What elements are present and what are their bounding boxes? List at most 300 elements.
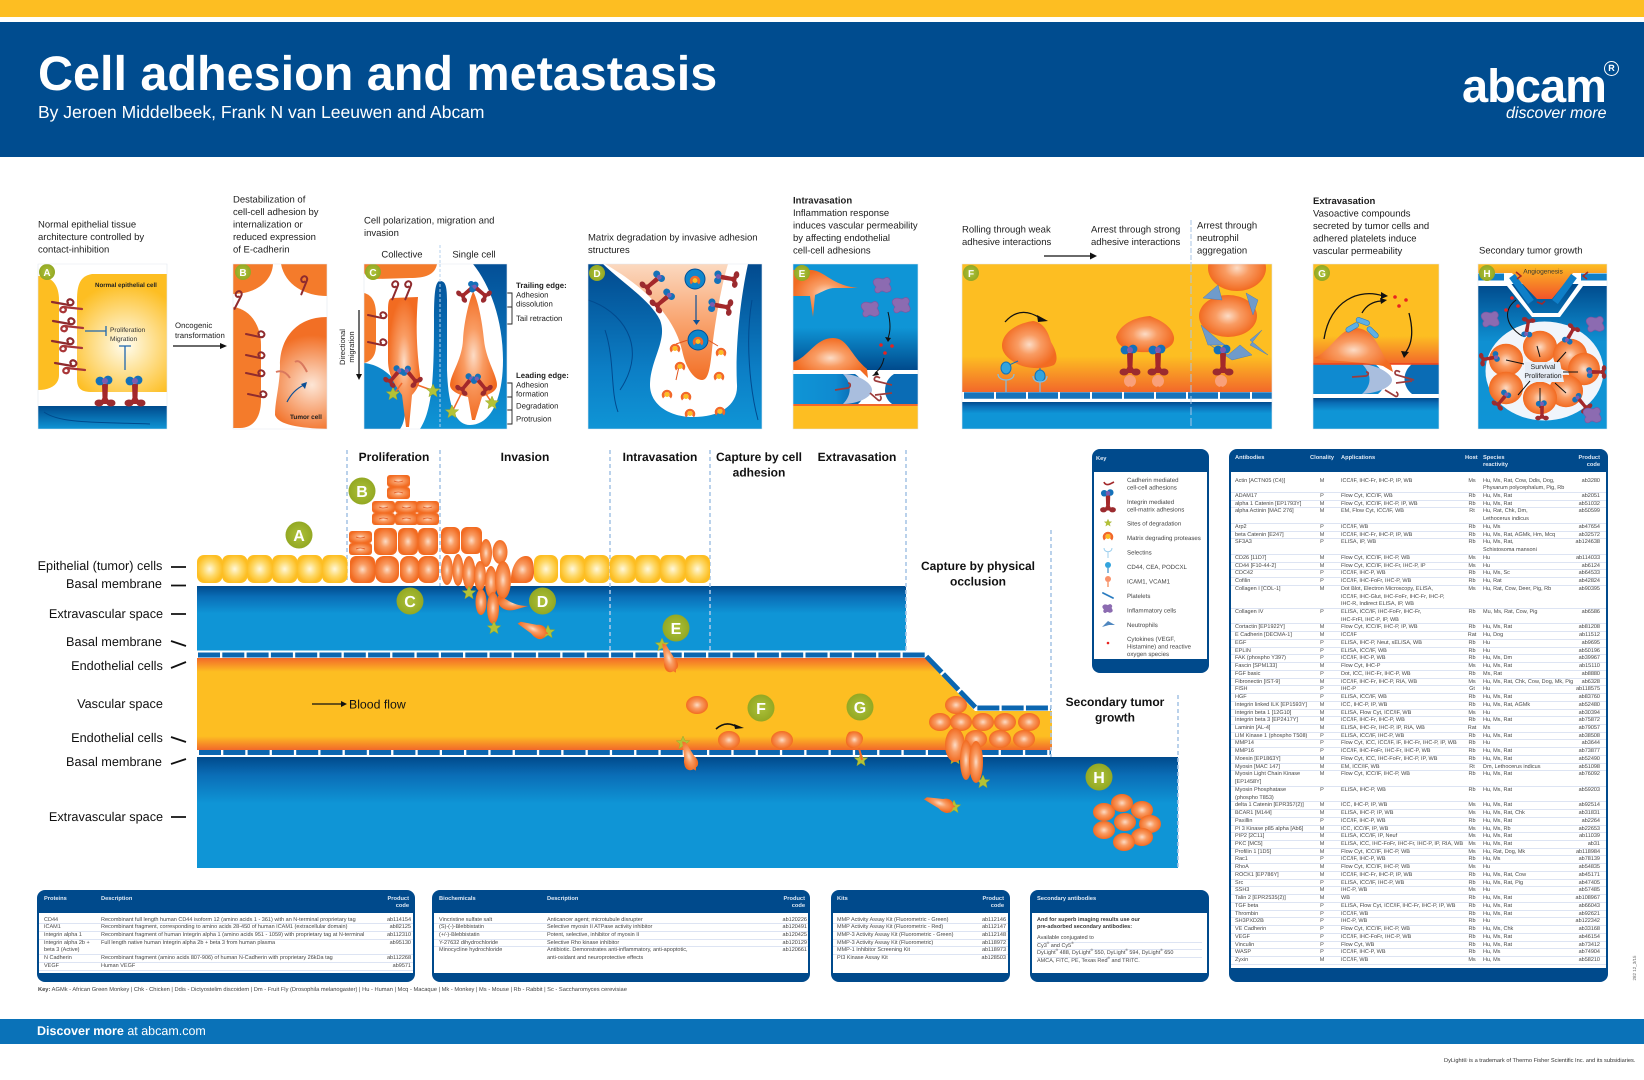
proteins rows: Full length native human Integrin alpha 2b + beta 3 from human plasma — [101, 940, 275, 946]
antibodies table rows: ab81208 — [1579, 624, 1600, 630]
panel D: matrix degradation — [588, 264, 762, 429]
icon: CD44 — [1105, 562, 1111, 573]
antibodies table rows: Ms — [1468, 710, 1476, 716]
antibodies table rows: ab66043 — [1579, 903, 1600, 909]
directional migration arrow: migration — [347, 331, 356, 363]
key labels: oxygen species — [1127, 651, 1169, 658]
icon: cadherin — [1104, 482, 1114, 485]
antibodies table rows: Hu, Ms — [1483, 856, 1500, 862]
badge F: F — [968, 269, 974, 280]
antibodies table rows: VE Cadherin — [1235, 926, 1266, 932]
caption B: internalization or — [233, 220, 303, 230]
antibodies table rows: LIM Kinase 1 (phospho T508) — [1235, 733, 1307, 739]
badge G — [1314, 265, 1330, 281]
antibodies table rows: CD44 [F10-44-2] — [1235, 563, 1276, 569]
antibodies table rows: P — [1320, 787, 1324, 793]
antibodies table rows: Rb — [1468, 872, 1476, 878]
proteins rows — [39, 913, 413, 973]
antibodies table rows: FGF basic — [1235, 671, 1260, 677]
antibodies table rows: Rb — [1468, 694, 1476, 700]
antibodies table rows: PIP2 [2C11] — [1235, 833, 1264, 839]
antibodies table rows: WB — [1341, 895, 1350, 901]
antibodies table rows — [1231, 472, 1606, 968]
antibodies table rows: Hu, Rat — [1483, 578, 1502, 584]
badges: B — [356, 484, 368, 501]
antibodies table rows: P — [1320, 648, 1324, 654]
antibodies table rows: Rb — [1468, 578, 1476, 584]
antibodies table rows: Flow Cyt, ICC, IHC-FoFr, IHC-P, IP, WB — [1341, 756, 1437, 762]
antibodies table rows: Ms, Rat — [1483, 671, 1502, 677]
secondary header: Secondary antibodies — [1037, 896, 1096, 902]
key labels: Integrin mediated — [1127, 499, 1174, 506]
antibodies table rows: Hu, Ms, Rat — [1483, 942, 1512, 948]
antibodies table rows: TGF beta — [1235, 903, 1258, 909]
antibodies table rows: M — [1320, 632, 1324, 638]
secondary tumor cluster — [1093, 794, 1161, 851]
antibodies table rows: P — [1320, 748, 1324, 754]
antibodies table rows: FAK (phospho Y397) — [1235, 655, 1286, 661]
antibodies table rows: M — [1320, 826, 1324, 832]
badges: C — [404, 594, 416, 611]
migrating tumor cells — [515, 616, 957, 815]
antibodies table rows: ab38508 — [1579, 733, 1600, 739]
panel B: destabilization — [232, 264, 327, 429]
key labels: Sites of degradation — [1127, 520, 1181, 528]
antibodies table rows: Integrin beta 1 [12G10] — [1235, 710, 1291, 716]
antibodies table rows: Hu, Dog — [1483, 632, 1503, 638]
badge F — [963, 265, 979, 281]
antibodies table rows: Rb — [1468, 609, 1476, 615]
antibodies table rows: ab124638 — [1576, 539, 1600, 545]
antibodies table rows: ADAM17 — [1235, 493, 1257, 499]
antibodies table rows: RhoA — [1235, 864, 1249, 870]
antibodies table rows: ab31831 — [1579, 810, 1600, 816]
antibodies table rows: Rb — [1468, 911, 1476, 917]
label: proliferation migration: Migration — [110, 336, 137, 343]
antibodies table rows: IHC-FrFl, IHC-P, IP, WB — [1341, 617, 1399, 623]
antibodies table rows: Hu, Ms, Rat — [1483, 802, 1512, 808]
antibodies table rows: Hu, Rat, Chk, Dm, — [1483, 508, 1528, 514]
antibodies table rows: ELISA, ICC/IF, IHC-P, WB — [1341, 733, 1404, 739]
antibodies table rows: PI 3 Kinase p85 alpha [Ab6] — [1235, 826, 1303, 832]
icon: selectin — [1104, 548, 1112, 558]
antibodies table rows: ICC/IF — [1341, 632, 1357, 638]
key labels: Cytokines (VEGF, — [1127, 636, 1175, 643]
antibodies table rows: Hu, Ms — [1483, 524, 1500, 530]
proteins rows: Recombinant fragment (amino acids 807-906) of human N-Cadherin with proprietary 26kDa tag — [101, 955, 333, 961]
antibodies table rows: ab74904 — [1579, 949, 1600, 955]
antibodies table rows: ab42824 — [1579, 578, 1600, 584]
antibodies table rows: Hu — [1483, 648, 1490, 654]
antibodies table rows: EGF — [1235, 640, 1246, 646]
antibodies table rows: ab92514 — [1579, 802, 1600, 808]
proteins rows: N Cadherin — [44, 955, 72, 961]
antibodies table rows: Laminin [AL-4] — [1235, 725, 1270, 731]
brackets and edge labels: Trailing edge: — [516, 281, 567, 290]
key labels: CD44, CEA, PODCXL — [1127, 564, 1188, 571]
kits rows: MMP Activity Assay Kit (Fluorometric - Green) — [837, 916, 948, 922]
brackets and edge labels — [507, 281, 569, 424]
proteins rows: ab112310 — [387, 932, 411, 938]
antibodies table rows: ab73877 — [1579, 748, 1600, 754]
proteins rows: ab114154 — [387, 916, 411, 922]
antibodies table rows: M — [1320, 849, 1324, 855]
antibodies table rows: Hu, Ms, Rat — [1483, 694, 1512, 700]
antibodies table rows: Hu, Ms, Rat — [1483, 818, 1512, 824]
antibodies table rows: M — [1320, 478, 1324, 484]
antibodies table rows: Hu, Ms, Rat, AGMk — [1483, 702, 1530, 708]
caption E: cell-cell adhesions — [793, 246, 871, 256]
caption G: vascular permeability — [1313, 246, 1402, 257]
antibodies table rows: Flow Cyt, ICC/IF, IHC-P, WB — [1341, 864, 1410, 870]
antibodies table rows: ab50599 — [1579, 508, 1600, 514]
poster code: 282 12_3/15 — [1632, 955, 1637, 981]
badge A: A — [43, 268, 51, 279]
antibodies table rows: Rb — [1468, 748, 1476, 754]
proteins rows: Human VEGF — [101, 963, 135, 969]
antibodies table rows: Cofilin — [1235, 578, 1250, 584]
brackets and edge labels: Protrusion — [516, 414, 552, 424]
antibodies table rows: (phospho T853) — [1235, 795, 1274, 801]
antibodies table rows: WASP — [1235, 949, 1251, 955]
antibodies table rows: Rb — [1468, 501, 1476, 507]
biochemicals rows: Anticancer agent; microtubule disrupter — [547, 916, 643, 922]
antibodies table rows: ELISA, IP, WB — [1341, 539, 1376, 545]
antibodies table rows: P — [1320, 655, 1324, 661]
antibodies table rows: ab114033 — [1576, 555, 1600, 561]
invading tumor cells — [441, 527, 534, 624]
kits rows: ab128503 — [982, 955, 1006, 961]
antibodies table rows: Hu, Ms, Rat, — [1483, 539, 1514, 545]
antibodies table rows: ICC/IF, IHC-P, WB — [1341, 655, 1386, 661]
biochemicals rows: (+/-)-Blebbistatin — [439, 932, 480, 938]
antibodies table rows: ab64533 — [1579, 570, 1600, 576]
antibodies table rows: Hu, Ms, Rat — [1483, 787, 1512, 793]
antibodies table rows: MMP16 — [1235, 748, 1254, 754]
antibodies table rows: P — [1320, 640, 1324, 646]
antibodies table rows: Flow Cyt, ICC/IF, IHC-P, WB — [1341, 771, 1410, 777]
antibodies table rows: M — [1320, 501, 1324, 507]
endothelium — [197, 652, 1052, 756]
antibodies table rows: Hu, Ms, Rat, Chk — [1483, 810, 1525, 816]
antibodies table rows: Integrin beta 3 [EP2417Y] — [1235, 717, 1298, 723]
antibodies table header: code — [1587, 462, 1600, 468]
proteins rows: Integrin alpha 2b + — [44, 940, 90, 946]
antibodies table rows: M — [1320, 872, 1324, 878]
antibodies table rows: M — [1320, 957, 1324, 963]
antibodies table rows: ab39967 — [1579, 655, 1600, 661]
antibodies table rows: ab11039 — [1579, 833, 1600, 839]
antibodies table rows: P — [1320, 733, 1324, 739]
yellow epithelial cells — [197, 555, 710, 583]
antibodies table rows: ab76092 — [1579, 771, 1600, 777]
antibodies table rows: ab22653 — [1579, 826, 1600, 832]
antibodies table rows: Rb — [1468, 624, 1476, 630]
icon: star — [1104, 519, 1112, 526]
upper extravascular space — [197, 586, 906, 651]
kits rows: MMP Activity Assay Kit (Fluorometric - Red) — [837, 924, 943, 930]
biochemicals rows: Selective myosin II ATPase activity inhibitor — [547, 924, 652, 930]
antibodies table rows: Ms — [1468, 833, 1476, 839]
antibodies table rows: Ms — [1468, 802, 1476, 808]
antibodies table rows: delta 1 Catenin [EPR357(2)] — [1235, 802, 1304, 808]
biochemicals rows: ab120491 — [783, 924, 807, 930]
antibodies table rows: P — [1320, 818, 1324, 824]
divider in F — [1190, 220, 1192, 264]
proliferating tumor cells — [349, 475, 439, 583]
antibodies table rows: [EP1458Y] — [1235, 779, 1261, 785]
antibodies table rows: Gt — [1469, 686, 1475, 692]
badge G: G — [1318, 269, 1326, 280]
antibodies table rows: Rb — [1468, 733, 1476, 739]
antibodies table rows: Rb — [1468, 787, 1476, 793]
captions F: aggregation — [1197, 246, 1247, 256]
antibodies table rows: Hu, Ms, Sc — [1483, 570, 1510, 576]
antibodies table rows: M — [1320, 895, 1324, 901]
key panel — [1092, 449, 1209, 673]
antibodies table rows: Hu, Ms, Rat — [1483, 493, 1512, 499]
antibodies table rows: M — [1320, 810, 1324, 816]
label: angiogenesis: Angiogenesis — [1523, 268, 1563, 276]
label: survival proliferation: Proliferation — [1524, 372, 1562, 380]
antibodies table rows: Physarum polycephalum, Pig, Rb — [1483, 485, 1564, 491]
biochemicals rows: ab120425 — [783, 932, 807, 938]
antibodies table rows: Rb — [1468, 756, 1476, 762]
antibodies table rows: P — [1320, 918, 1324, 924]
antibodies table rows: ab3644 — [1582, 740, 1600, 746]
antibodies table rows: ICC/IF, IHC-FoFr, IHC-P, WB — [1341, 578, 1411, 584]
antibodies table rows: Moesin [EP1863Y] — [1235, 756, 1281, 762]
directional migration arrow — [338, 310, 362, 380]
antibodies table rows: MMP14 — [1235, 740, 1254, 746]
antibodies table rows: ab15110 — [1579, 663, 1600, 669]
antibodies table rows: Dot Blot, Electron Microscopy, ELISA, — [1341, 586, 1433, 592]
kits rows: PI3 Kinase Assay Kit — [837, 955, 888, 961]
antibodies table rows: ab6124 — [1582, 563, 1600, 569]
table: biochemicals — [432, 890, 810, 982]
antibodies table rows: P — [1320, 856, 1324, 862]
antibodies table rows: ab78139 — [1579, 856, 1600, 862]
antibodies table rows: ICC/IF, IHC-Fr, IHC-P, IP, WB — [1341, 532, 1412, 538]
secondary body: And for superb imaging results use our — [1037, 916, 1140, 922]
caption C: Cell polarization, migration and — [364, 216, 494, 226]
antibodies table rows: P — [1320, 740, 1324, 746]
abcam logo: discover more — [1506, 105, 1606, 122]
antibodies table rows: Hu, Ms, Rat — [1483, 663, 1512, 669]
antibodies table rows: E Cadherin [DECMA-1] — [1235, 632, 1292, 638]
antibodies table rows: ab58210 — [1579, 957, 1600, 963]
tissue layer labels: Basal membrane — [66, 635, 162, 649]
biochemicals rows: Selective Rho kinase inhibitor — [547, 940, 619, 946]
antibodies table rows: Flow Cyt, WB — [1341, 942, 1374, 948]
antibodies table rows: ab54835 — [1579, 864, 1600, 870]
antibodies table rows: alpha Actinin [MAC 276] — [1235, 508, 1294, 514]
antibodies table rows: P — [1320, 949, 1324, 955]
caption G: Extravasation — [1313, 196, 1376, 207]
antibodies table rows: ICC/IF, WB — [1341, 524, 1368, 530]
antibodies table header: Clonality — [1310, 454, 1334, 460]
tissue layer labels: Endothelial cells — [71, 659, 163, 673]
abcam logo: R — [1608, 63, 1615, 73]
subtitle: By Jeroen Middelbeek, Frank N van Leeuwen and Abcam — [38, 102, 485, 122]
badges: H — [1093, 770, 1105, 787]
dashed stage dividers — [347, 450, 1178, 868]
stage heading: capture by physical occlusion: Capture by physical — [921, 559, 1035, 573]
kits rows: MMP-1 Inhibitor Screening Kit — [837, 947, 910, 953]
antibodies table rows: ELISA, Flow Cyt, ICC/IF, WB — [1341, 710, 1411, 716]
antibodies table rows: ELISA, IHC-P, WB — [1341, 787, 1386, 793]
kits header: Product — [982, 896, 1004, 902]
captions F: adhesive interactions — [1091, 237, 1180, 248]
kits rows: ab118972 — [982, 940, 1006, 946]
antibodies table rows: ab8880 — [1582, 671, 1600, 677]
proteins header — [44, 896, 409, 909]
antibodies table rows: Hu, Ms, Rat — [1483, 771, 1512, 777]
kits rows: MMP-3 Activity Assay Kit (Fluorometric) — [837, 940, 933, 946]
label: survival proliferation: Survival — [1531, 364, 1555, 371]
kits rows — [833, 913, 1008, 973]
proteins rows: ab82125 — [390, 924, 411, 930]
biochemicals rows: Y-27632 dihydrochloride — [439, 940, 498, 946]
antibodies table rows: P — [1320, 671, 1324, 677]
antibodies table header: Species — [1483, 454, 1505, 460]
antibodies table rows: ICC/IF, IHC-P, WB — [1341, 949, 1386, 955]
antibodies table rows: ICC/IF, IHC-P, WB — [1341, 570, 1386, 576]
antibodies table header: Antibodies — [1235, 454, 1264, 460]
antibodies table rows: Hu, Rat, Dog, Mk — [1483, 849, 1525, 855]
antibodies table rows: ROCK1 [EP786Y] — [1235, 872, 1279, 878]
panel E: intravasation — [793, 264, 918, 429]
badge H: H — [1483, 269, 1491, 280]
antibodies table rows: Rat — [1468, 632, 1476, 638]
antibodies table rows: Talin 2 [EPR2535(2)] — [1235, 895, 1286, 901]
illustration canvas — [38, 196, 1608, 868]
antibodies table rows: Hu — [1483, 686, 1490, 692]
antibodies table rows: CD26 [11D7] — [1235, 555, 1266, 561]
antibodies table rows: Hu, Ms, Rat — [1483, 733, 1512, 739]
biochemicals header — [439, 896, 805, 909]
antibodies table rows: M — [1320, 802, 1324, 808]
antibodies table rows: Arp2 — [1235, 524, 1247, 530]
antibodies table rows: Flow Cyt, ICC/IF, IHC-P, WB — [1341, 926, 1410, 932]
antibodies table rows: Rb — [1468, 880, 1476, 886]
kits rows: ab112148 — [982, 932, 1006, 938]
biochemicals rows — [434, 913, 808, 973]
antibodies table rows: ICC/IF, IHC-Glut, IHC-FoFr, IHC-Fr, IHC-P, — [1341, 594, 1444, 600]
antibodies table rows: ICC, IHC-P, IP, WB — [1341, 802, 1387, 808]
biochemicals header: Biochemicals — [439, 896, 476, 902]
antibodies table rows: ELISA, ICC/IF, IHC-P, WB — [1341, 880, 1404, 886]
kits rows: ab112146 — [982, 916, 1006, 922]
antibodies table rows: Flow Cyt, ICC/IF, IHC-P, IP, WB — [1341, 501, 1418, 507]
antibodies table rows: ab51032 — [1579, 501, 1600, 507]
proteins header: code — [396, 903, 409, 909]
tissue layer labels: Epithelial (tumor) cells — [38, 559, 162, 573]
antibodies table rows: PKC [MC5] — [1235, 841, 1263, 847]
antibodies table rows: Flow Cyt, ICC/IF, IHC-P, WB — [1341, 849, 1410, 855]
antibodies table rows: Integrin linked ILK [EP1593Y] — [1235, 702, 1307, 708]
antibodies table rows: ab6586 — [1582, 609, 1600, 615]
table: proteins — [37, 890, 415, 982]
antibodies table rows: Rb — [1468, 740, 1476, 746]
caption A: Normal epithelial tissue — [38, 220, 136, 230]
biochemicals rows: Potent, selective, inhibitor of myosin II — [547, 932, 639, 938]
antibodies table rows: Hu, Ms, Rat — [1483, 756, 1512, 762]
biochemicals header: Description — [547, 896, 578, 902]
antibodies table rows: Rb — [1468, 648, 1476, 654]
tissue layer labels: Basal membrane — [66, 755, 162, 769]
icon: protease — [1103, 532, 1113, 540]
arrow: oncogenic transformation: Oncogenic — [175, 321, 212, 330]
antibodies table rows: M — [1320, 833, 1324, 839]
antibodies table rows: IHC-P, WB — [1341, 887, 1367, 893]
antibodies table rows: Ms — [1468, 849, 1476, 855]
antibodies table rows: Rb — [1468, 818, 1476, 824]
antibodies table rows: BCAR1 [M144] — [1235, 810, 1272, 816]
key labels — [1127, 477, 1201, 658]
antibodies table rows: Zyxin — [1235, 957, 1248, 963]
antibodies table rows: ab118575 — [1576, 686, 1600, 692]
antibodies table rows: ELISA, IHC-Fr, IHC-P, IP, RIA, WB — [1341, 725, 1425, 731]
antibodies table header: Applications — [1341, 454, 1375, 460]
antibodies table rows: M — [1320, 624, 1324, 630]
antibodies table rows: ELISA, IHC-P, IP, WB — [1341, 810, 1393, 816]
badges — [286, 478, 1112, 790]
antibodies table rows: Hu, Ms, Rat — [1483, 624, 1512, 630]
kits header — [837, 896, 1004, 909]
antibodies table rows: Hu — [1483, 864, 1490, 870]
antibodies table rows: Rb — [1468, 771, 1476, 777]
icon: inflammatory cell — [1103, 604, 1112, 613]
blood flow label: Blood flow — [349, 698, 406, 712]
antibodies table rows: M — [1320, 887, 1324, 893]
proteins rows: CD44 — [44, 916, 58, 922]
antibodies table rows: M — [1320, 555, 1324, 561]
kits rows: MMP-3 Activity Assay Kit (Fluorometric - Green) — [837, 932, 953, 938]
antibodies table rows: Actin [ACTN05 (C4)] — [1235, 478, 1285, 484]
trademark note: DyLight® is a trademark of Thermo Fisher Scientific Inc. and its subsidiaries. — [1444, 1058, 1635, 1064]
antibodies table rows: HGF — [1235, 694, 1247, 700]
antibodies table rows: Ms — [1468, 826, 1476, 832]
antibodies table rows: Ms — [1468, 810, 1476, 816]
antibodies table rows: Schistosoma mansoni — [1483, 547, 1537, 553]
antibodies table rows: P — [1320, 539, 1324, 545]
subheads collective and single cell: Collective — [381, 250, 423, 260]
stage heading: secondary tumor growth: growth — [1095, 710, 1135, 724]
badge D: D — [593, 269, 601, 280]
blood flow label — [312, 698, 406, 712]
antibodies table rows: ELISA, ICC/IF, WB — [1341, 648, 1387, 654]
subheads collective and single cell: Single cell — [452, 250, 496, 260]
antibodies table rows: ab47405 — [1579, 880, 1600, 886]
brackets and edge labels: dissolution — [516, 300, 553, 308]
antibodies table rows: Hu, Ms, Rb — [1483, 826, 1511, 832]
key labels: Matrix degrading proteases — [1127, 535, 1201, 542]
antibodies table rows: Dot, ICC, IHC-Fr, IHC-P, WB — [1341, 671, 1411, 677]
secondary body — [1032, 913, 1207, 973]
proteins header: Description — [101, 896, 132, 902]
antibodies table rows: Fibronectin [IST-9] — [1235, 679, 1280, 685]
label: proliferation migration: Proliferation — [110, 327, 145, 334]
antibodies table rows: ELISA, Flow Cyt, ICC/IF, IHC-Fr, IHC-P, IP, WB — [1341, 903, 1455, 909]
badges: E — [671, 621, 682, 638]
antibodies table rows: ab73412 — [1579, 942, 1600, 948]
antibodies table rows: Hu, Ms, Rat — [1483, 911, 1512, 917]
antibodies table rows: VEGF — [1235, 934, 1250, 940]
antibodies table rows: ab51098 — [1579, 764, 1600, 770]
antibodies table rows: Hu, Ms, Rat, AGMk, Hm, Mcq — [1483, 532, 1555, 538]
brackets and edge labels: Adhesion — [516, 380, 549, 390]
